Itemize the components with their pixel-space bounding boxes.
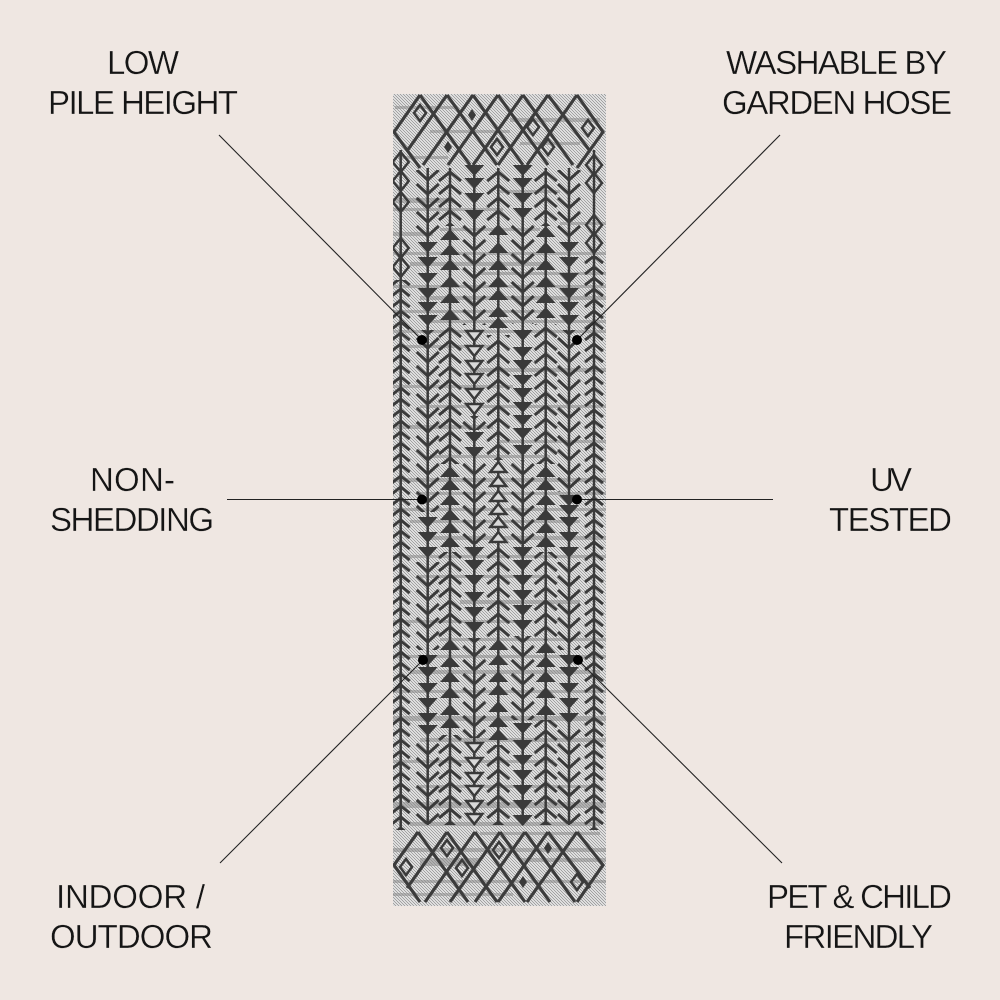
label: low pile height <box>48 44 238 121</box>
label: non-shedding: NON- <box>90 461 175 498</box>
callout line: low pile height <box>219 135 427 345</box>
column 8 <box>557 170 581 824</box>
label: non-shedding: SHEDDING <box>50 501 214 538</box>
column 3 <box>438 171 462 825</box>
column 2 <box>416 170 440 824</box>
bottom diamond border <box>394 832 603 902</box>
label: washable by garden hose: GARDEN HOSE <box>722 84 952 121</box>
label: low pile height: PILE HEIGHT <box>48 84 238 121</box>
stems <box>401 150 594 830</box>
label: indoor / outdoor: OUTDOOR <box>50 918 213 955</box>
label: pet and child friendly: FRIENDLY <box>784 918 933 955</box>
column 6 <box>510 165 535 826</box>
callout line: non-shedding <box>227 494 427 504</box>
label: uv tested: TESTED <box>829 501 952 538</box>
label: uv tested <box>829 461 952 538</box>
label: uv tested: UV <box>870 461 912 498</box>
label: indoor / outdoor: INDOOR / <box>56 878 206 915</box>
column 4 <box>462 165 486 826</box>
label: washable by garden hose <box>722 44 952 121</box>
top diamond border <box>394 95 603 168</box>
label: indoor / outdoor <box>50 878 213 955</box>
callout line: pet and child <box>573 655 782 863</box>
column 7 <box>534 171 558 825</box>
label: pet and child friendly: PET & CHILD <box>767 878 952 915</box>
callout line: uv tested <box>572 494 773 504</box>
column 9 <box>584 154 604 830</box>
column 5 <box>486 171 510 825</box>
rug <box>388 94 607 906</box>
column 1 <box>393 152 411 830</box>
label: washable by garden hose: WASHABLE BY <box>726 44 947 81</box>
callout line: washable <box>572 135 780 345</box>
label: pet and child friendly <box>767 878 952 955</box>
callout line: indoor outdoor <box>220 655 428 863</box>
label: low pile height: LOW <box>107 44 180 81</box>
label: non-shedding <box>50 461 214 538</box>
